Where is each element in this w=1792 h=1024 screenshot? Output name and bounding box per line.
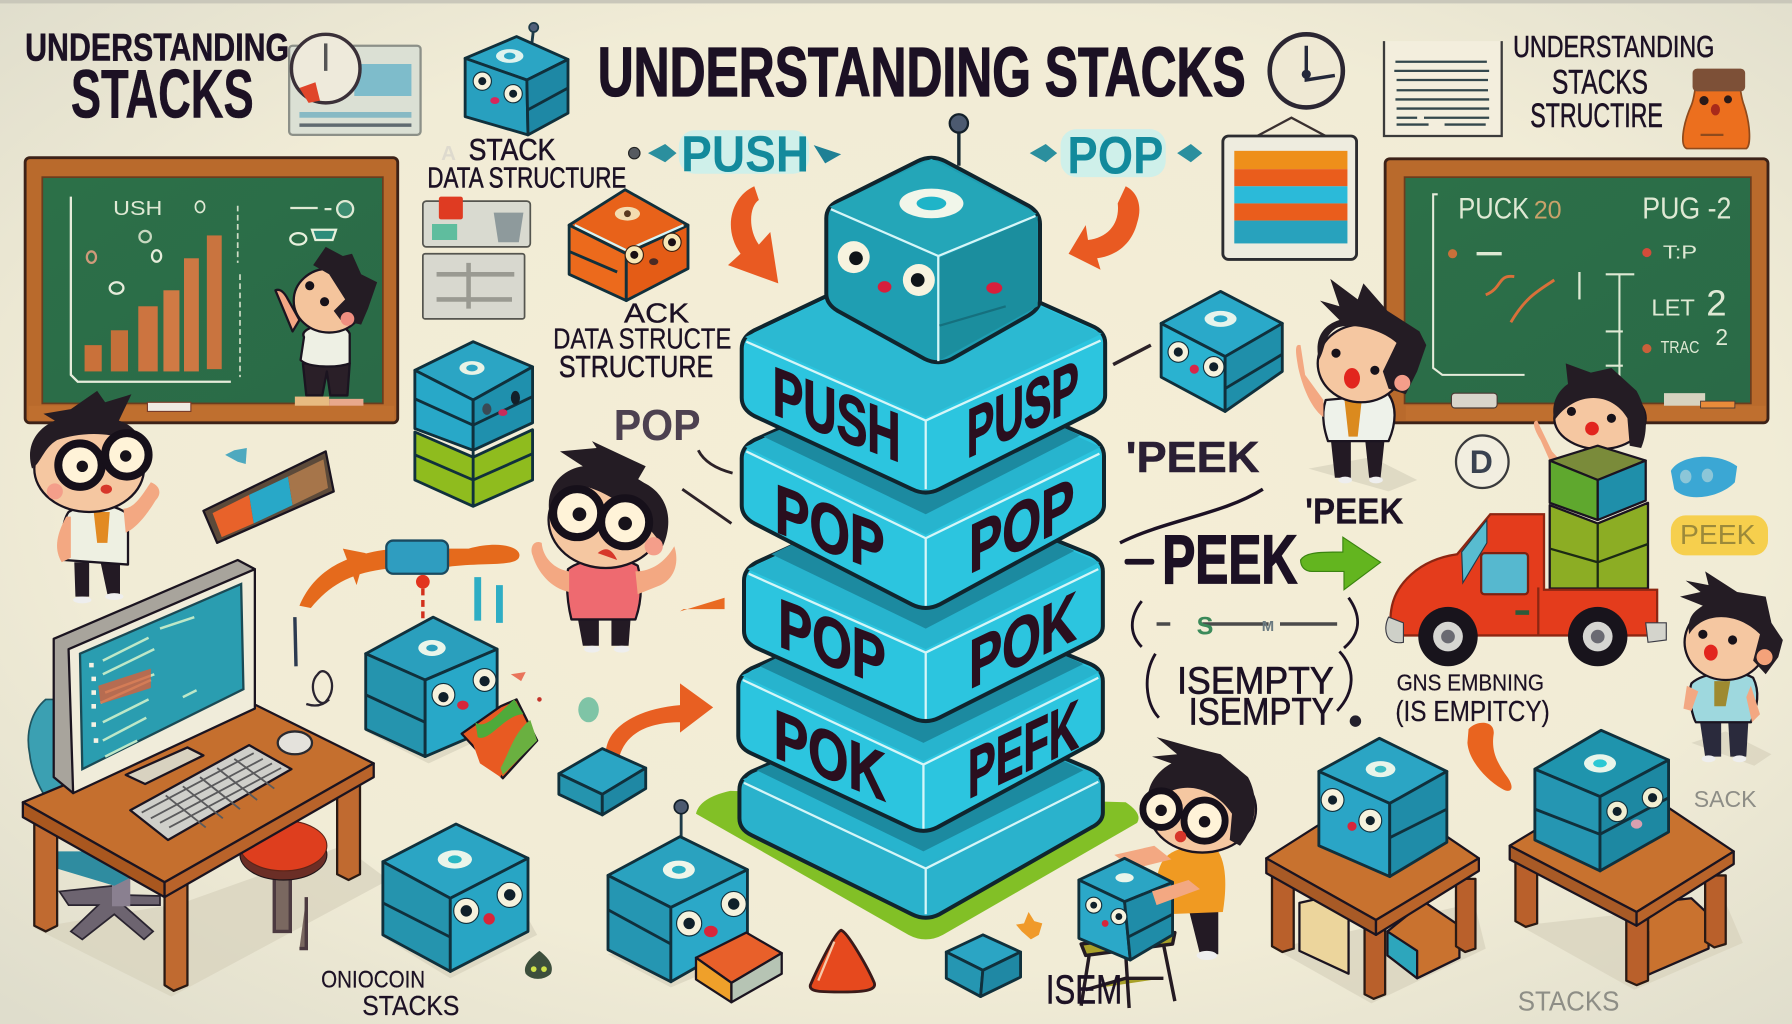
pop label bbox=[1030, 127, 1202, 186]
character: right bbox=[1680, 571, 1783, 762]
character: glasses center bbox=[532, 441, 676, 653]
icon: teal blob bbox=[225, 448, 247, 464]
title: top-left: UNDERSTANDING bbox=[25, 27, 289, 70]
chalk notes: PUG -2 bbox=[1642, 190, 1731, 225]
label: stack data structure bbox=[427, 132, 626, 194]
icon: orange squiggle bbox=[1467, 723, 1512, 791]
label: oniocoin stacks: ONIOCOIN bbox=[321, 966, 425, 993]
pointer stroke bbox=[1113, 345, 1151, 365]
stack tier: pop / pop: POP bbox=[775, 471, 885, 589]
stack tier: pop / pok: POK bbox=[969, 578, 1077, 704]
label: understanding stacks structure: STACKS bbox=[1552, 64, 1648, 102]
icon: red cone bbox=[810, 930, 875, 992]
stack tier: push / pusp: PUSP bbox=[967, 346, 1079, 474]
arrow: pop down bbox=[1069, 186, 1139, 270]
stack tier: pok / pefk: POK bbox=[774, 695, 886, 817]
label: sack: SACK bbox=[1694, 786, 1757, 812]
icon: mid-left cube bbox=[366, 617, 542, 757]
icon: small colored block bbox=[203, 451, 334, 543]
arrow: green bbox=[1301, 537, 1381, 590]
icon: flat box with arrow bbox=[559, 683, 713, 815]
isempty notes: M bbox=[1262, 619, 1274, 635]
icon: right clock bbox=[1270, 34, 1343, 107]
icon: d badge bbox=[1456, 435, 1509, 488]
icon: small green-eyed blob bbox=[525, 951, 552, 979]
isempty notes: ISEMPTY bbox=[1177, 660, 1334, 702]
label: stack data structure: DATA STRUCTURE bbox=[427, 162, 626, 194]
chalk notes: TRAC bbox=[1661, 337, 1699, 357]
peek labels: 'PEEK bbox=[1305, 490, 1404, 531]
isempty notes: S bbox=[1197, 612, 1213, 640]
stack tier: pop / pok: POP bbox=[778, 585, 886, 702]
character: tie bbox=[1296, 279, 1426, 483]
desk legs bbox=[34, 782, 360, 991]
cube on right table bbox=[1535, 730, 1669, 871]
panel: left chalkboard bbox=[25, 158, 398, 423]
icon: red truck with green boxes bbox=[1386, 446, 1666, 666]
arrow: push down bbox=[728, 186, 778, 283]
panel: right chalkboard bbox=[1385, 159, 1768, 423]
desk top bbox=[23, 705, 374, 882]
isempty notes bbox=[1132, 598, 1361, 733]
isempty notes: ISEMPTY bbox=[1189, 691, 1334, 733]
stack tier: push / pusp bbox=[742, 254, 1105, 493]
green boxes bbox=[1550, 446, 1648, 589]
label: stack data structure: STACK bbox=[469, 132, 556, 167]
icon: mouse bbox=[278, 731, 312, 754]
label: is empty: GNS EMBNING bbox=[1397, 669, 1544, 695]
character behind green stack bbox=[1534, 363, 1646, 471]
icon: small cube top bbox=[465, 23, 568, 135]
chalk notes: 2 bbox=[1715, 324, 1728, 350]
peek labels: 'PEEK bbox=[1126, 434, 1259, 482]
chalk notes: PUCK bbox=[1458, 192, 1529, 225]
cube on stool bbox=[1079, 858, 1173, 960]
peek labels: PEEK bbox=[1162, 521, 1297, 598]
label: understanding stacks structure: UNDERSTANDING bbox=[1513, 29, 1714, 64]
icon: note paper bbox=[1384, 41, 1502, 136]
icon: chair bbox=[28, 699, 160, 939]
label: isem: ISEM bbox=[1046, 966, 1122, 1012]
icon: orange jar bbox=[1683, 69, 1749, 149]
label: stack data structure: A bbox=[441, 142, 456, 165]
label: oniocoin stacks: STACKS bbox=[362, 990, 459, 1021]
icon: right blue cube bbox=[1161, 291, 1282, 411]
icon: orange flame bbox=[1016, 912, 1042, 939]
title: top-left: STACKS bbox=[71, 56, 254, 133]
label: understanding stacks structure: STRUCTIRE bbox=[1530, 97, 1663, 135]
label: stack data structure 2 bbox=[553, 297, 731, 384]
icon: green gem bbox=[578, 697, 599, 722]
pointer strokes bbox=[682, 450, 733, 523]
icon: bottom cube with book bbox=[608, 800, 782, 1002]
peek yellow pill bbox=[1671, 515, 1768, 555]
icon: d badge: D bbox=[1470, 444, 1493, 480]
push label bbox=[629, 124, 841, 182]
label: oniocoin stacks bbox=[321, 966, 459, 1021]
bar chart bbox=[71, 197, 231, 382]
orange tag bbox=[680, 598, 725, 611]
panel: right table with cube bbox=[1510, 730, 1734, 985]
title: top-left bbox=[25, 27, 289, 133]
icon: green base bbox=[696, 791, 1139, 939]
label: stack data structure 2: DATA STRUCTE bbox=[553, 324, 731, 356]
icon: book bbox=[696, 933, 782, 1002]
icon: clock with card bbox=[289, 34, 421, 135]
icon: small box bottom bbox=[946, 935, 1021, 997]
panel: left table with cube bbox=[1266, 738, 1479, 999]
pop label: POP bbox=[1067, 127, 1163, 186]
label: stacks grey: STACKS bbox=[1518, 985, 1619, 1016]
chalk notes: 20 bbox=[1534, 196, 1562, 224]
character: orange shirt with cube on stool bbox=[1079, 737, 1256, 1008]
icon: stripes poster bbox=[1223, 118, 1357, 259]
peek labels bbox=[1120, 434, 1404, 598]
stack tier: pok / pefk: PEFK bbox=[968, 686, 1079, 814]
label: stack data structure 2: STRUCTURE bbox=[559, 349, 713, 384]
chalk notes: 2 bbox=[1706, 282, 1727, 323]
stack tier: pop / pok bbox=[744, 489, 1103, 721]
label: understanding stacks structure bbox=[1513, 29, 1714, 135]
label: pop grey: POP bbox=[614, 402, 701, 450]
stack tier: push / pusp: PUSH bbox=[773, 353, 901, 478]
push label: PUSH bbox=[681, 124, 809, 182]
chalk notes: T:P bbox=[1663, 241, 1697, 262]
stack tier: base bbox=[739, 701, 1103, 918]
icon: bottom-left cube bbox=[383, 824, 528, 971]
icon: colored box bbox=[462, 699, 537, 778]
chalk notes bbox=[1433, 190, 1731, 394]
icon: stool bbox=[240, 821, 327, 949]
title: main heading: UNDERSTANDING STACKS bbox=[598, 33, 1246, 111]
chalk text: USH bbox=[113, 197, 162, 220]
label: is empty bbox=[1395, 669, 1550, 728]
stack tier: pop / pop bbox=[742, 368, 1104, 608]
arrow: arc with block bbox=[295, 541, 519, 706]
cube on left table bbox=[1319, 738, 1447, 877]
central stack bbox=[738, 114, 1105, 918]
chalk text bbox=[87, 197, 353, 377]
character at left chalkboard bbox=[275, 247, 377, 406]
peek yellow pill: PEEK bbox=[1680, 519, 1755, 550]
character: glasses left bbox=[30, 391, 159, 603]
icon: document cards bbox=[423, 197, 530, 319]
ground shadows bbox=[34, 457, 1771, 1003]
stack tier: pop / pop: POP bbox=[969, 464, 1074, 589]
chalk eraser bbox=[147, 402, 191, 411]
icon: monitor bbox=[54, 560, 255, 793]
panel: computer desk bbox=[23, 560, 374, 991]
label: stack data structure 2: ACK bbox=[624, 297, 689, 328]
top cube with face bbox=[826, 114, 1040, 362]
stack tier: pok / pefk bbox=[738, 598, 1103, 831]
icon: orange cube bbox=[569, 190, 688, 301]
chalk notes: LET bbox=[1651, 294, 1695, 320]
icon: keyboard bbox=[130, 745, 291, 840]
stool bbox=[1081, 933, 1175, 1008]
icon: blue blob bbox=[1671, 457, 1737, 497]
label: is empty: (IS EMPITCY) bbox=[1395, 696, 1550, 728]
boxes under table bbox=[1299, 898, 1459, 978]
icon: blue and green stack bbox=[415, 342, 533, 506]
